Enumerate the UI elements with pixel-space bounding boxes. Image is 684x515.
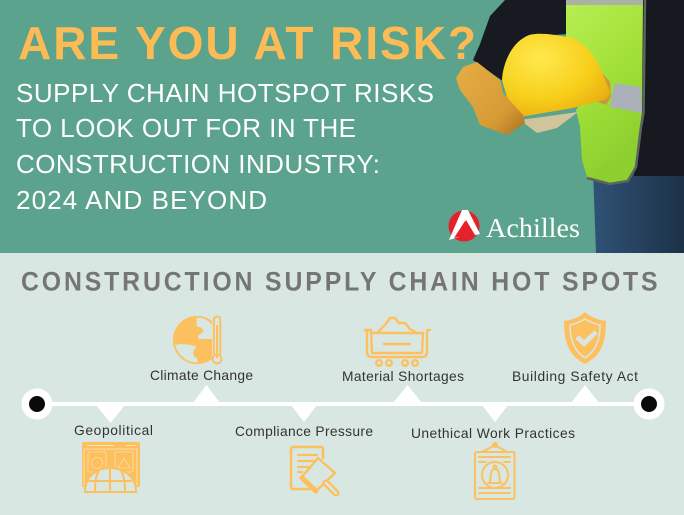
vest reflective band — [610, 83, 642, 113]
photo: construction worker holding helmet — [456, 0, 684, 253]
subtitle: SUPPLY CHAIN HOTSPOT RISKS — [16, 78, 434, 108]
right hand glove — [598, 68, 611, 105]
label: Climate Change: Climate Change — [150, 368, 253, 383]
icon: material cart — [365, 318, 430, 366]
label: Compliance Pressure: Compliance Pressure — [235, 424, 373, 439]
label: Geopolitical: Geopolitical — [74, 423, 153, 438]
panel: hero banner — [0, 0, 684, 253]
helmet — [502, 34, 610, 117]
vest top reflective strip — [566, 0, 643, 5]
logo: Achilles: Achilles — [486, 213, 580, 243]
subtitle — [16, 78, 434, 215]
label: Building Safety Act: Building Safety Act — [512, 369, 638, 384]
label: Material Shortages: Material Shortages — [342, 369, 464, 384]
icon: climate globe with thermometer — [173, 314, 224, 366]
heading: CONSTRUCTION SUPPLY CHAIN HOT SPOTS — [21, 268, 658, 297]
helmet liner — [520, 112, 578, 133]
icon: geopolitical window with globe — [82, 442, 140, 492]
dark sleeve — [473, 0, 568, 82]
icon: compliance document and gavel — [291, 447, 336, 493]
subtitle: CONSTRUCTION INDUSTRY: — [16, 149, 380, 179]
subtitle: 2024 AND BEYOND — [16, 185, 267, 215]
vest edge — [587, 0, 645, 184]
subtitle: TO LOOK OUT FOR IN THE — [16, 113, 356, 143]
title: ARE YOU AT RISK? — [18, 17, 476, 69]
timeline line and markers — [22, 385, 664, 423]
jeans — [593, 170, 684, 253]
glove — [456, 62, 525, 135]
dark jacket right — [634, 0, 684, 176]
panel: hot spots timeline — [0, 253, 684, 515]
high-visibility vest — [566, 0, 643, 183]
icon: safety shield — [564, 312, 606, 364]
label: Unethical Work Practices: Unethical Work Practices — [411, 426, 575, 441]
logo: Achilles — [448, 210, 580, 243]
icon: bell notice board — [475, 443, 514, 499]
